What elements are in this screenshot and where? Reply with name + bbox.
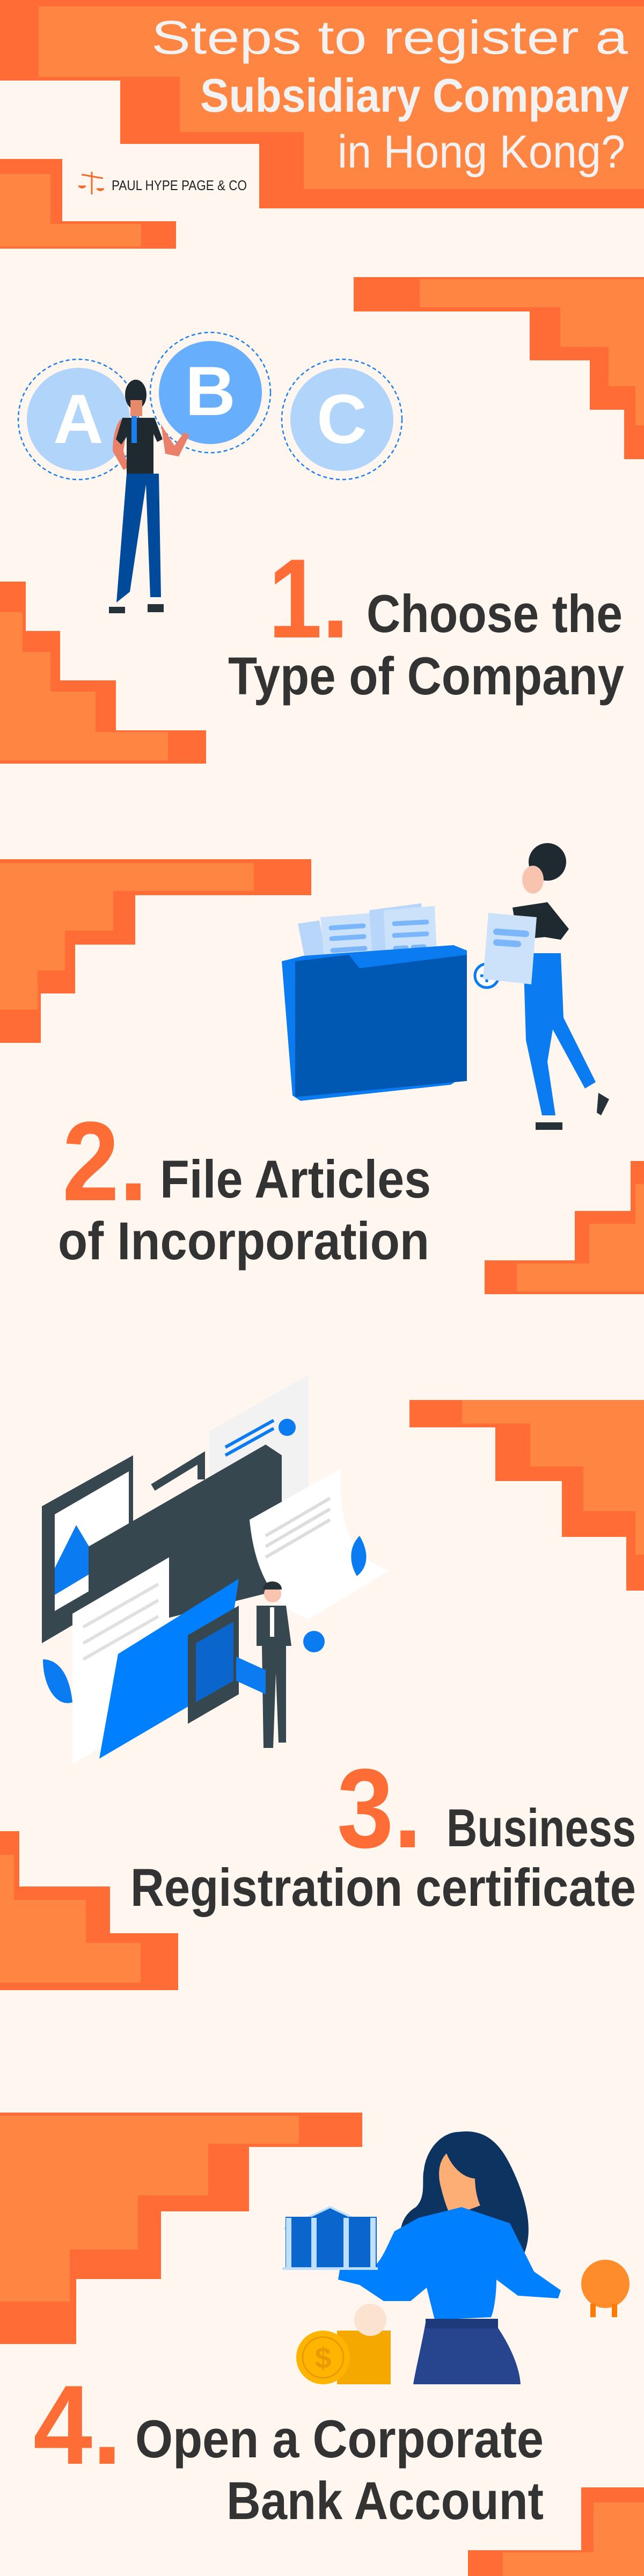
- title: [151, 11, 629, 178]
- logo: [78, 172, 247, 194]
- illustration: ABC circles with man: C: [317, 380, 367, 458]
- step 4 heading: Bank Account: [226, 2471, 544, 2530]
- step 1 heading: 1.: [268, 535, 349, 662]
- illustration: woman with bank and piggy bank: $: [315, 2341, 331, 2375]
- step 4 heading: 4.: [33, 2362, 122, 2488]
- illustration: folder and woman: [282, 843, 609, 1130]
- header stairs: [0, 0, 644, 249]
- illustration: woman with bank and piggy bank: [282, 2131, 630, 2384]
- step 2 heading: 2.: [62, 1098, 148, 1224]
- step 4 heading: Open a Corporate: [135, 2409, 544, 2469]
- section 4 stairs: [0, 1933, 644, 2576]
- section 2 stairs: [0, 859, 644, 1294]
- logo: PAUL HYPE PAGE & CO: [112, 177, 247, 193]
- step 1 heading: [228, 535, 624, 706]
- title: Steps to register a: [151, 11, 628, 64]
- section 3 stairs: [0, 1400, 644, 1933]
- step 2 heading: File Articles: [160, 1149, 431, 1209]
- illustration: ABC circles with man: A: [53, 380, 104, 458]
- step 3 heading: 3.: [337, 1745, 422, 1871]
- illustration: ABC circles with man: [18, 332, 402, 613]
- step 2 heading: [58, 1098, 431, 1271]
- step 4 heading: [33, 2362, 544, 2530]
- illustration: business registration: [42, 1375, 389, 1764]
- title: in Hong Kong?: [338, 126, 625, 178]
- illustration: ABC circles with man: B: [185, 352, 236, 430]
- step 2 heading: of Incorporation: [58, 1211, 429, 1271]
- section 1 stairs: [0, 277, 644, 764]
- step 3 heading: [130, 1745, 636, 1917]
